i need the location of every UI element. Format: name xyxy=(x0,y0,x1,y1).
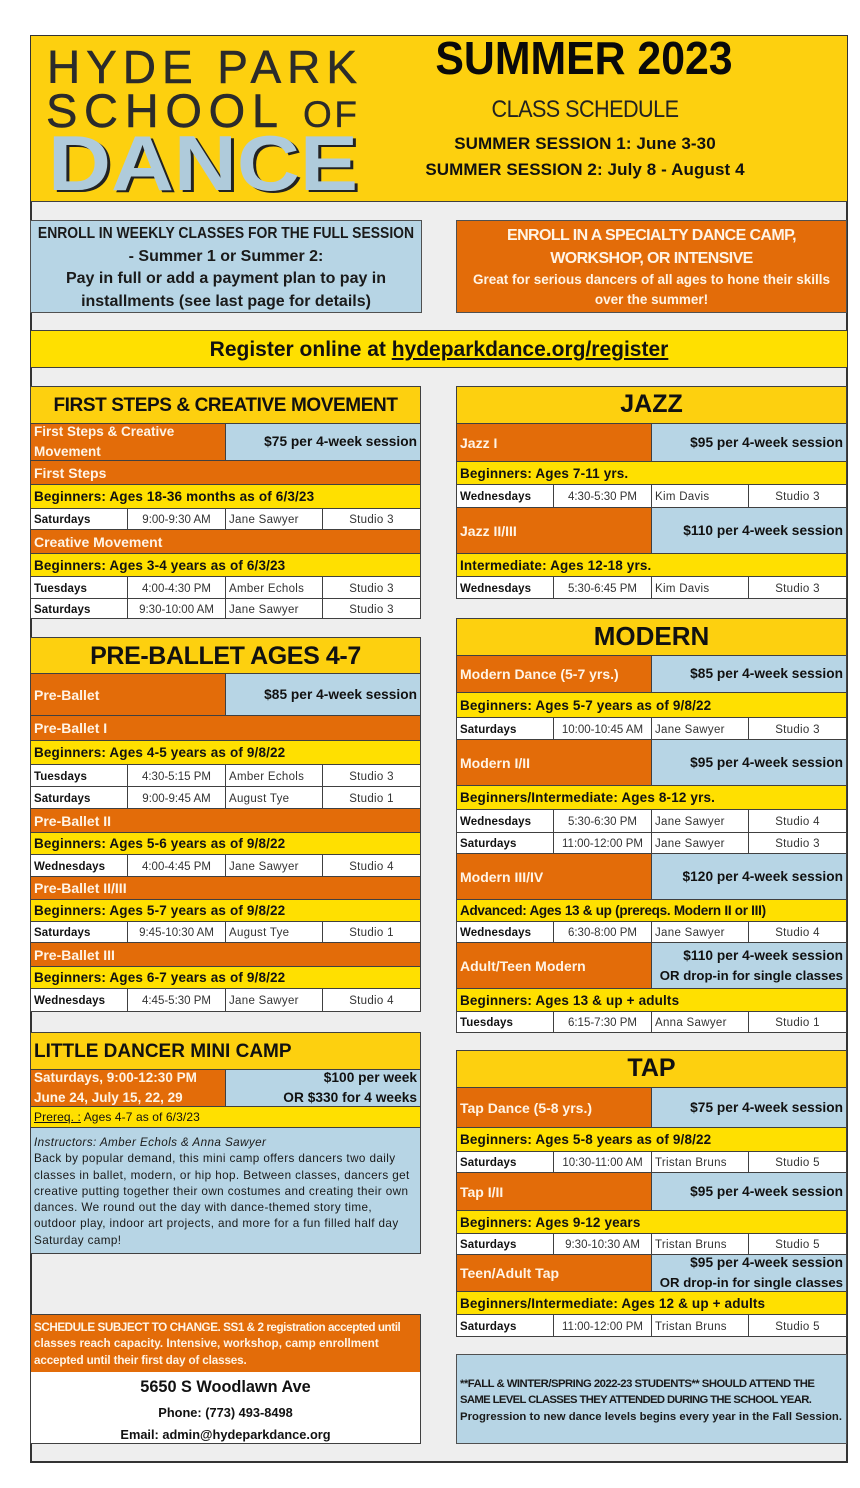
schedule notice: accepted until their first day of classes. xyxy=(34,1354,247,1367)
schedule row: Studio 4 xyxy=(349,995,394,1007)
age level: Beginners: Ages 5-7 years as of 9/8/22 xyxy=(34,903,285,918)
schedule row: Wednesdays xyxy=(34,860,105,872)
title: SUMMER 2023 xyxy=(435,32,733,84)
age level: Intermediate: Ages 12-18 yrs. xyxy=(460,558,651,572)
header banner xyxy=(31,36,847,202)
schedule row: 6:15-7:30 PM xyxy=(568,1017,637,1029)
schedule row: 9:45-10:30 AM xyxy=(139,927,214,939)
schedule row: Kim Davis xyxy=(655,491,709,503)
contact info: 5650 S Woodlawn Ave xyxy=(140,1378,311,1396)
schedule row: Wednesdays xyxy=(460,582,531,594)
age level: Beginners: Ages 3-4 years as of 6/3/23 xyxy=(34,558,285,572)
schedule row xyxy=(457,485,846,508)
schedule row: August Tye xyxy=(229,927,289,939)
age level xyxy=(457,1292,846,1315)
age level xyxy=(31,485,420,509)
schedule row xyxy=(457,1012,846,1033)
heading xyxy=(31,387,420,424)
price row: Pre-Ballet xyxy=(34,686,99,702)
price row: $110 per 4-week session xyxy=(683,948,843,962)
schedule row: 4:00-4:45 PM xyxy=(142,860,211,872)
schedule row: Wednesdays xyxy=(34,995,105,1007)
age level xyxy=(31,967,420,989)
price row: $85 per 4-week session xyxy=(264,687,417,702)
age level xyxy=(457,786,846,810)
schedule row: Saturdays xyxy=(34,792,91,804)
price row: Modern Dance (5-7 yrs.) xyxy=(460,666,619,682)
price row xyxy=(31,424,420,461)
schedule row: 9:30-10:00 AM xyxy=(139,604,214,616)
price row: Teen/Adult Tap xyxy=(460,1265,559,1281)
price row xyxy=(457,656,846,693)
callout: weekly classes: Pay in full or add a payment plan to pay in xyxy=(66,270,386,287)
price row: $95 per 4-week session xyxy=(690,1184,843,1198)
schedule row: Amber Echols xyxy=(229,582,304,594)
class name: Pre-Ballet I xyxy=(34,720,107,736)
schedule row: 10:30-11:00 AM xyxy=(562,1157,643,1169)
schedule row xyxy=(31,599,420,619)
schedule row: Studio 3 xyxy=(349,604,394,616)
schedule row: Tristan Bruns xyxy=(655,1320,727,1332)
camp description: Saturday camp! xyxy=(34,1234,121,1247)
callout: specialty camp: ENROLL IN A SPECIALTY DANCE CAMP, xyxy=(507,227,796,244)
class name xyxy=(31,809,420,833)
camp description xyxy=(31,1128,420,1254)
session dates: SUMMER SESSION 1: June 3-30 xyxy=(454,134,716,153)
schedule row xyxy=(31,922,420,943)
schedule row: Jane Sawyer xyxy=(655,724,725,736)
price row: Modern III/IV xyxy=(460,868,543,884)
schedule row: Studio 3 xyxy=(775,491,820,503)
schedule notice: classes reach capacity. Intensive, workshop, camp enrollment xyxy=(34,1337,379,1350)
contact info xyxy=(30,1372,421,1444)
age level xyxy=(457,1211,846,1234)
schedule row: Studio 3 xyxy=(775,724,820,736)
price row xyxy=(457,740,846,786)
schedule row: Saturdays xyxy=(460,1157,517,1169)
schedule row xyxy=(31,509,420,530)
schedule row: Tristan Bruns xyxy=(655,1239,727,1251)
class name xyxy=(31,461,420,485)
price row: Jazz I xyxy=(460,434,497,450)
age level xyxy=(31,741,420,765)
price row: OR drop-in for single classes xyxy=(660,968,843,982)
price row: June 24, July 15, 22, 29 xyxy=(34,1090,183,1105)
schedule row: Kim Davis xyxy=(655,582,709,594)
age level: Beginners: Ages 9-12 years xyxy=(460,1214,640,1230)
register banner: Register online at hydeparkdance.org/register xyxy=(210,338,668,361)
schedule row: Tuesdays xyxy=(460,1017,513,1029)
panel: pre-ballet xyxy=(30,637,421,1012)
schedule row: Jane Sawyer xyxy=(229,995,299,1007)
schedule notice xyxy=(30,1314,421,1373)
schedule row: Studio 5 xyxy=(775,1239,820,1251)
schedule row: Studio 4 xyxy=(775,927,820,939)
price row xyxy=(457,854,846,900)
heading: PRE-BALLET AGES 4-7 xyxy=(90,642,361,670)
callout: specialty camp: Great for serious dancers of all ages to hone their skills xyxy=(473,272,830,287)
schedule row xyxy=(457,833,846,854)
age level: Beginners/Intermediate: Ages 12 & up + adults xyxy=(460,1296,765,1310)
schedule row: Amber Echols xyxy=(229,770,304,782)
class name: Pre-Ballet II xyxy=(34,812,111,828)
schedule row: Jane Sawyer xyxy=(655,816,725,828)
schedule row: Studio 4 xyxy=(775,816,820,828)
schedule row xyxy=(457,1234,846,1255)
panel: little dancer mini camp xyxy=(30,1032,421,1254)
schedule row: Studio 3 xyxy=(349,582,394,594)
note: returning students: **FALL & WINTER/SPRING 2022-23 STUDENTS** SHOULD ATTEND THE xyxy=(460,1378,814,1390)
logo: Hyde Park School of Dance: OF xyxy=(303,94,357,135)
contact info: Phone: (773) 493-8498 xyxy=(158,1405,293,1420)
note: returning students xyxy=(456,1354,847,1444)
price row: Modern I/II xyxy=(460,754,530,770)
class name xyxy=(31,716,420,741)
schedule row: Saturdays xyxy=(460,1320,517,1332)
logo: Hyde Park School of Dance xyxy=(46,41,361,202)
camp description: creative putting together their own costumes and creating their own xyxy=(34,1185,408,1198)
class name xyxy=(31,877,420,900)
schedule row: Tuesdays xyxy=(34,770,87,782)
callout: weekly classes: - Summer 1 or Summer 2: xyxy=(129,248,323,265)
price row: Tap I/II xyxy=(460,1184,503,1200)
schedule row: Studio 3 xyxy=(775,582,820,594)
schedule row: Jane Sawyer xyxy=(655,927,725,939)
price row: $95 per 4-week session xyxy=(690,1255,843,1270)
camp description: dances. We round out the day with dance-themed story time, xyxy=(34,1201,372,1214)
schedule row: Jane Sawyer xyxy=(655,838,725,850)
note: returning students: SAME LEVEL CLASSES THEY ATTENDED DURING THE SCHOOL YEAR. xyxy=(460,1394,811,1406)
heading xyxy=(31,638,420,674)
schedule row: Studio 5 xyxy=(775,1157,820,1169)
schedule row: Jane Sawyer xyxy=(229,604,299,616)
schedule row: 4:00-4:30 PM xyxy=(142,582,211,594)
price row: $95 per 4-week session xyxy=(690,754,843,770)
age level xyxy=(457,989,846,1012)
schedule row xyxy=(31,989,420,1012)
age level: Beginners: Ages 18-36 months as of 6/3/23 xyxy=(34,489,314,504)
age level: Beginners: Ages 5-6 years as of 9/8/22 xyxy=(34,836,285,851)
schedule row: Saturdays xyxy=(460,1239,517,1251)
schedule row xyxy=(457,922,846,943)
callout: weekly classes: ENROLL IN WEEKLY CLASSES FOR THE FULL SESSION xyxy=(38,225,414,242)
price row: $75 per 4-week session xyxy=(264,434,417,449)
schedule row: Studio 1 xyxy=(349,927,394,939)
session dates: SUMMER SESSION 2: July 8 - August 4 xyxy=(425,160,745,179)
logo: Hyde Park School of Dance: HYDE PARK xyxy=(47,41,357,93)
age level xyxy=(457,1128,846,1152)
heading xyxy=(457,1051,846,1088)
camp description: Back by popular demand, this mini camp offers dancers two daily xyxy=(34,1152,396,1165)
age level: Beginners: Ages 5-7 years as of 9/8/22 xyxy=(460,698,711,712)
age level xyxy=(457,693,846,718)
price row xyxy=(31,674,420,716)
price row: OR $330 for 4 weeks xyxy=(283,1090,417,1105)
schedule row xyxy=(457,1152,846,1173)
schedule row: Jane Sawyer xyxy=(229,860,299,872)
age level xyxy=(457,900,846,922)
schedule row: Jane Sawyer xyxy=(229,514,299,526)
schedule row: Saturdays xyxy=(460,724,517,736)
schedule row xyxy=(31,765,420,787)
price row: $110 per 4-week session xyxy=(683,522,843,538)
schedule row: 4:30-5:30 PM xyxy=(568,491,637,503)
price row xyxy=(31,1070,420,1107)
session dates xyxy=(425,134,745,179)
price row: First Steps & Creative xyxy=(34,424,174,439)
schedule row: 9:30-10:30 AM xyxy=(565,1239,640,1251)
schedule row: 9:00-9:30 AM xyxy=(142,514,211,526)
age level xyxy=(457,462,846,485)
heading: FIRST STEPS & CREATIVE MOVEMENT xyxy=(53,394,398,416)
price row xyxy=(457,1173,846,1211)
schedule notice: SCHEDULE SUBJECT TO CHANGE. SS1 & 2 registration accepted until xyxy=(34,1321,400,1334)
panel: modern xyxy=(456,618,847,1033)
schedule row: 11:00-12:00 PM xyxy=(562,1320,643,1332)
price row xyxy=(457,508,846,554)
camp description: Instructors: Amber Echols & Anna Sawyer xyxy=(34,1136,266,1149)
schedule row: 11:00-12:00 PM xyxy=(562,838,643,850)
panel: jazz xyxy=(456,386,847,599)
schedule row: 4:30-5:15 PM xyxy=(142,770,211,782)
callout: specialty camp: over the summer! xyxy=(595,292,708,307)
contact info: Email: admin@hydeparkdance.org xyxy=(120,1427,331,1442)
schedule row: 4:45-5:30 PM xyxy=(142,995,211,1007)
schedule row xyxy=(457,1315,846,1337)
schedule row: Studio 1 xyxy=(349,792,394,804)
age level xyxy=(31,554,420,577)
callout: specialty camp: WORKSHOP, OR INTENSIVE xyxy=(550,250,753,267)
price row: $85 per 4-week session xyxy=(690,666,843,681)
heading xyxy=(31,1033,420,1070)
price row xyxy=(457,424,846,462)
heading: JAZZ xyxy=(620,390,683,418)
heading: MODERN xyxy=(594,621,709,651)
schedule row: Saturdays xyxy=(34,514,91,526)
price row: $120 per 4-week session xyxy=(683,868,843,884)
heading xyxy=(457,619,846,656)
heading xyxy=(457,387,846,424)
age level: Beginners: Ages 7-11 yrs. xyxy=(460,466,628,480)
price row: OR drop-in for single classes xyxy=(660,1275,843,1290)
age level: Beginners: Ages 6-7 years as of 9/8/22 xyxy=(34,970,285,985)
schedule row: Wednesdays xyxy=(460,816,531,828)
price row xyxy=(457,1088,846,1128)
subtitle: CLASS SCHEDULE xyxy=(492,96,678,123)
schedule row xyxy=(457,810,846,833)
schedule row xyxy=(31,577,420,599)
prerequisite: Prereq. : Ages 4-7 as of 6/3/23 xyxy=(34,1110,200,1124)
note: returning students: Progression to new dance levels begins every year in the Fall Session. xyxy=(460,1411,842,1423)
price row xyxy=(457,1255,846,1292)
schedule row: Tuesdays xyxy=(34,582,87,594)
price row: Adult/Teen Modern xyxy=(460,958,586,974)
class name: Pre-Ballet III xyxy=(34,946,115,962)
schedule row: Saturdays xyxy=(34,604,91,616)
schedule row xyxy=(31,787,420,809)
callout: specialty camp xyxy=(456,220,847,313)
price row: Tap Dance (5-8 yrs.) xyxy=(460,1100,592,1116)
age level: Advanced: Ages 13 & up (prereqs. Modern II or III) xyxy=(460,903,766,918)
class name: Creative Movement xyxy=(34,534,162,550)
class name: First Steps xyxy=(34,464,106,480)
price row: $100 per week xyxy=(324,1070,417,1085)
schedule row: Studio 3 xyxy=(775,838,820,850)
schedule row: Saturdays xyxy=(460,838,517,850)
schedule row: Saturdays xyxy=(34,927,91,939)
class name: Pre-Ballet II/III xyxy=(34,880,127,896)
class name xyxy=(31,943,420,967)
prerequisite xyxy=(31,1107,420,1128)
price row: Movement xyxy=(34,444,101,459)
schedule row: Studio 5 xyxy=(775,1320,820,1332)
age level: Beginners/Intermediate: Ages 8-12 yrs. xyxy=(460,790,715,805)
age level: Beginners: Ages 13 & up + adults xyxy=(460,992,679,1008)
schedule row: 5:30-6:45 PM xyxy=(568,582,637,594)
schedule row: Anna Sawyer xyxy=(655,1017,727,1029)
age level xyxy=(31,900,420,922)
age level xyxy=(457,554,846,577)
callout: weekly classes: installments (see last page for details) xyxy=(81,293,371,310)
schedule row: Tristan Bruns xyxy=(655,1157,727,1169)
age level: Beginners: Ages 4-5 years as of 9/8/22 xyxy=(34,745,285,760)
logo: Hyde Park School of Dance: SCHOOL xyxy=(46,84,278,137)
age level: Beginners: Ages 5-8 years as of 9/8/22 xyxy=(460,1132,711,1147)
schedule row xyxy=(457,577,846,599)
schedule row: 9:00-9:45 AM xyxy=(142,792,211,804)
camp description: outdoor play, indoor art projects, and more for a fun filled half day xyxy=(34,1217,399,1230)
schedule row: Studio 3 xyxy=(349,770,394,782)
price row: Saturdays, 9:00-12:30 PM xyxy=(34,1070,197,1085)
panel: tap xyxy=(456,1050,847,1337)
panel: first steps & creative movement xyxy=(30,386,421,619)
schedule row xyxy=(457,718,846,740)
camp description: classes in ballet, modern, or hip hop. Between classes, dancers get xyxy=(34,1169,410,1182)
schedule row: August Tye xyxy=(229,792,289,804)
price row xyxy=(457,943,846,989)
price row: $95 per 4-week session xyxy=(690,434,843,450)
heading: TAP xyxy=(627,1054,676,1082)
schedule row: 10:00-10:45 AM xyxy=(562,724,643,736)
heading: LITTLE DANCER MINI CAMP xyxy=(34,1040,292,1062)
callout: weekly classes xyxy=(30,220,422,313)
schedule row: Studio 3 xyxy=(349,514,394,526)
schedule row: Wednesdays xyxy=(460,491,531,503)
register banner xyxy=(31,330,847,368)
price row: $75 per 4-week session xyxy=(690,1100,843,1114)
schedule row: Studio 1 xyxy=(775,1017,820,1029)
schedule row: Studio 4 xyxy=(349,860,394,872)
schedule row: 6:30-8:00 PM xyxy=(568,927,637,939)
price row: Jazz II/III xyxy=(460,522,517,538)
class name xyxy=(31,530,420,554)
schedule row xyxy=(31,855,420,877)
age level xyxy=(31,833,420,855)
schedule row: Wednesdays xyxy=(460,927,531,939)
schedule row: 5:30-6:30 PM xyxy=(568,816,637,828)
